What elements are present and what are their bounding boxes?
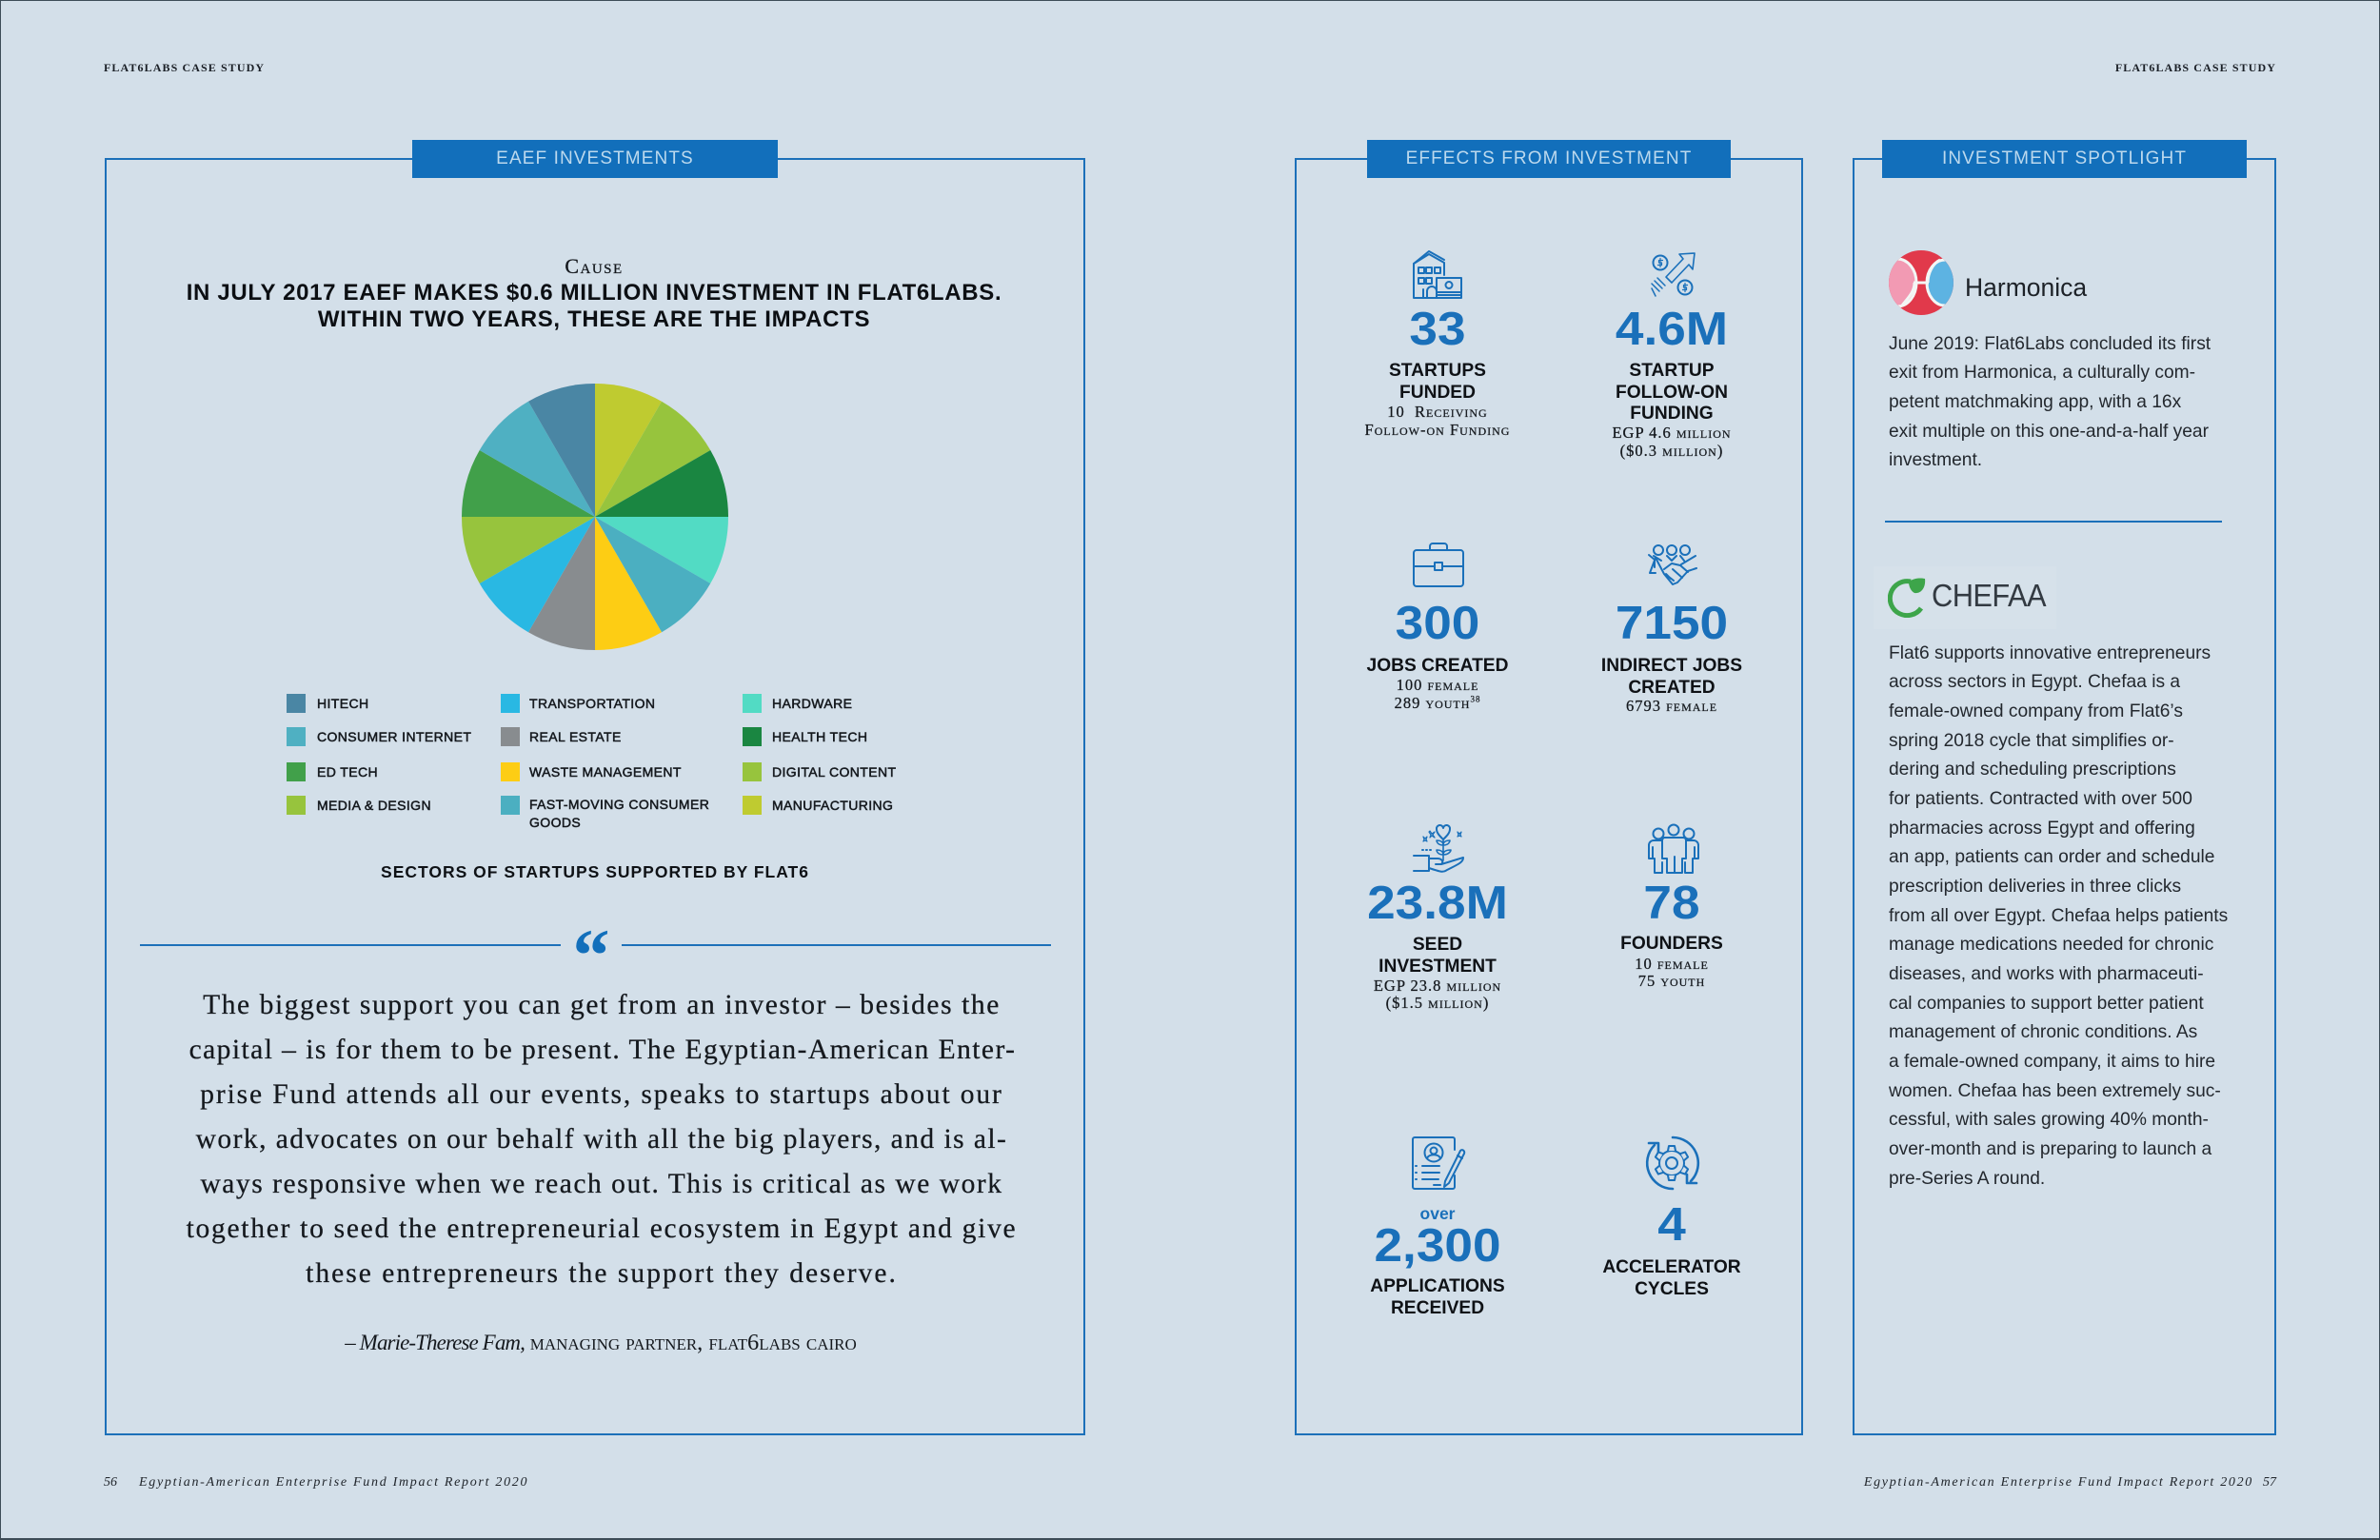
legend item: hitech: HITECH	[317, 696, 369, 711]
cause label: Cause	[565, 254, 624, 278]
footer left: Egyptian-American Enterprise Fund Impact Report 2020	[139, 1475, 528, 1490]
text: Chefaa summary: Flat6 supports innovative entrepreneurs	[1889, 643, 2211, 662]
chart caption: SECTORS OF STARTUPS SUPPORTED BY FLAT6	[381, 862, 809, 881]
number: 33	[1409, 303, 1466, 354]
label: FOUNDERS	[1620, 934, 1723, 954]
legend item: fast-moving consumer goods	[501, 796, 709, 830]
legend item: digital content	[743, 762, 896, 781]
panel heading: EAEF investments: EAEF INVESTMENTS	[496, 148, 694, 168]
label: INDIRECT JOBS	[1601, 656, 1742, 676]
pull quote: The biggest support you can get from an investor – besides the	[203, 990, 1001, 1020]
number: 23.8M	[1367, 878, 1508, 929]
text: Chefaa summary: cal companies to support better patient	[1889, 994, 2204, 1014]
text: Chefaa summary: management of chronic conditions. As	[1889, 1022, 2197, 1042]
legend item: hardware	[743, 694, 852, 713]
detail: 289 youth38	[1395, 693, 1480, 712]
number: 4	[1657, 1199, 1686, 1251]
logo mark: green ring with leaf	[1888, 578, 1926, 618]
icon: briefcase	[1413, 543, 1464, 587]
legend item: health tech: HEALTH TECH	[772, 729, 867, 744]
icon: application form with pencil	[1412, 1136, 1465, 1191]
headline: investment statement: IN JULY 2017 EAEF MAKES $0.6 MILLION INVESTMENT IN FLAT6LABS.	[187, 280, 1002, 306]
legend item: media and design: MEDIA & DESIGN	[317, 798, 431, 813]
legend item: fast-moving consumer goods: GOODS	[529, 815, 581, 830]
legend item: digital content: DIGITAL CONTENT	[772, 764, 896, 780]
label: JOBS CREATED	[1367, 656, 1508, 676]
icon: handshake with people	[1648, 544, 1697, 585]
running header left: FLAT6LABS CASE STUDY	[104, 61, 265, 74]
logo wordmark: CHEFAA	[1932, 579, 2046, 614]
label: STARTUPS	[1389, 361, 1486, 381]
text: Chefaa summary: manage medications needed for chronic	[1889, 935, 2213, 955]
pull quote	[187, 990, 1017, 1289]
text: Chefaa summary: spring 2018 cycle that simplifies or-	[1889, 731, 2174, 751]
legend item: manufacturing	[743, 796, 893, 815]
panel: investment spotlight frame	[1853, 158, 2276, 1435]
pull quote: together to seed the entrepreneurial ecosystem in Egypt and give	[187, 1213, 1017, 1243]
stat: founders	[1620, 824, 1723, 990]
number: 2,300	[1374, 1220, 1501, 1272]
text: Harmonica summary: June 2019: Flat6Labs concluded its first	[1889, 333, 2211, 354]
icon: hand holding a growing plant	[1413, 824, 1464, 873]
detail	[1365, 403, 1510, 438]
legend item: manufacturing: MANUFACTURING	[772, 798, 893, 813]
text: Chefaa summary: diseases, and works with pharmaceuti-	[1889, 964, 2204, 984]
panel: effects from investment frame	[1295, 158, 1803, 1435]
icon: three people	[1648, 824, 1699, 874]
detail: 6793 female	[1626, 697, 1717, 715]
text: Chefaa summary: cessful, with sales growing 40% month-	[1889, 1110, 2209, 1130]
running header right: FLAT6LABS CASE STUDY	[2115, 61, 2276, 74]
text: Harmonica summary: exit from Harmonica, a culturally com-	[1889, 363, 2195, 383]
label: INVESTMENT	[1378, 957, 1497, 977]
panel heading: effects from investment	[1367, 140, 1731, 178]
detail: 10 Receiving	[1387, 403, 1488, 421]
legend item: hardware: HARDWARE	[772, 696, 852, 711]
pull quote: these entrepreneurs the support they deserve.	[306, 1258, 898, 1289]
stat: seed investment	[1367, 824, 1508, 1012]
detail	[1395, 676, 1480, 712]
label	[1389, 361, 1486, 403]
legend item: waste management	[501, 762, 682, 781]
headline: investment statement: WITHIN TWO YEARS, THESE ARE THE IMPACTS	[318, 306, 870, 332]
footer left: 56	[104, 1475, 117, 1490]
legend item: media and design	[287, 796, 431, 815]
pull quote: work, advocates on our behalf with all the big players, and is al-	[196, 1123, 1007, 1154]
detail: 100 female	[1397, 676, 1478, 694]
label: FUNDING	[1630, 404, 1714, 424]
text: Chefaa summary: for patients. Contracted with over 500	[1889, 789, 2192, 809]
label: SEED	[1413, 935, 1462, 955]
legend item: ed tech: ED TECH	[317, 764, 378, 780]
icon: gear with cycle arrows	[1646, 1136, 1699, 1190]
detail: 10 female	[1635, 954, 1709, 973]
company name: Harmonica: Harmonica	[1965, 273, 2087, 302]
pull quote: ways responsive when we reach out. This is critical as we work	[200, 1169, 1003, 1199]
legend item: fast-moving consumer goods: FAST-MOVING CONSUMER	[529, 797, 709, 812]
label: ACCELERATOR	[1602, 1257, 1741, 1277]
panel heading: investment spotlight: INVESTMENT SPOTLIGHT	[1942, 148, 2187, 168]
label	[1616, 361, 1728, 424]
legend item: real estate: REAL ESTATE	[529, 729, 622, 744]
legend item: health tech	[743, 727, 867, 746]
legend: sectors	[287, 694, 896, 830]
text: Chefaa summary: an app, patients can order and schedule	[1889, 847, 2214, 867]
text: Harmonica summary: investment.	[1889, 450, 1982, 470]
stat: startups funded	[1365, 250, 1510, 438]
text: Harmonica summary: exit multiple on this one-and-a-half year	[1889, 422, 2209, 442]
number: 78	[1643, 878, 1700, 929]
legend item: consumer internet: CONSUMER INTERNET	[317, 729, 471, 744]
detail	[1612, 424, 1732, 460]
legend item: waste management: WASTE MANAGEMENT	[529, 764, 682, 780]
panel: EAEF investments frame	[105, 158, 1085, 1435]
legend item: transportation	[501, 694, 655, 713]
legend item: consumer internet	[287, 727, 471, 746]
pie chart: sectors of startups	[462, 384, 728, 650]
label: CYCLES	[1635, 1279, 1709, 1299]
number: 4.6M	[1616, 303, 1728, 354]
stat: startup follow-on funding	[1612, 252, 1732, 460]
stat: accelerator cycles	[1557, 1134, 1786, 1300]
label	[1323, 1276, 1552, 1319]
number: 300	[1396, 598, 1479, 649]
panel heading: effects from investment: EFFECTS FROM INVESTMENT	[1406, 148, 1692, 168]
label: RECEIVED	[1391, 1298, 1484, 1318]
logo: Harmonica mark	[1889, 250, 1954, 315]
number: 7150	[1616, 598, 1728, 649]
panel heading: investment spotlight	[1882, 140, 2247, 178]
label: FUNDED	[1399, 383, 1476, 403]
text: Chefaa summary: prescription deliveries in three clicks	[1889, 877, 2181, 897]
label	[1601, 656, 1742, 698]
label: FOLLOW-ON	[1616, 383, 1728, 403]
text: Chefaa summary: pre-Series A round.	[1889, 1169, 2045, 1189]
icon: quotation mark: “	[573, 914, 609, 997]
text: Chefaa summary: pharmacies across Egypt and offering	[1889, 819, 2195, 839]
text: Chefaa summary: female-owned company from Flat6’s	[1889, 701, 2183, 721]
label: APPLICATIONS	[1370, 1276, 1505, 1296]
detail	[1635, 954, 1709, 990]
label	[1557, 1257, 1786, 1300]
text: Harmonica summary: petent matchmaking app, with a 16x	[1889, 392, 2181, 412]
label	[1378, 935, 1497, 977]
text: Chefaa summary: women. Chefaa has been extremely suc-	[1889, 1081, 2221, 1101]
text: Harmonica summary	[1889, 329, 2211, 476]
stat: applications received	[1323, 1134, 1552, 1319]
detail: ($0.3 million)	[1620, 442, 1723, 460]
stat: indirect jobs created	[1601, 544, 1742, 715]
footer right: 57	[2263, 1475, 2276, 1490]
text: Chefaa summary: dering and scheduling prescriptions	[1889, 760, 2176, 780]
detail: EGP 23.8 million	[1374, 977, 1501, 994]
panel heading: EAEF investments	[412, 140, 778, 178]
text: Chefaa summary: from all over Egypt. Chefaa helps patients	[1889, 906, 2228, 926]
headline: investment statement	[187, 280, 1002, 332]
text: Chefaa summary: a female-owned company, it aims to hire	[1889, 1052, 2215, 1072]
detail	[1374, 977, 1501, 1012]
quote attribution: – Marie-Therese Fam, managing partner, flat6labs cairo	[345, 1330, 857, 1355]
detail: Follow-on Funding	[1365, 421, 1510, 438]
icon: building and money	[1413, 250, 1462, 299]
detail: 75 youth	[1638, 972, 1705, 990]
label: STARTUP	[1629, 361, 1715, 381]
detail: EGP 4.6 million	[1612, 424, 1732, 442]
label: CREATED	[1628, 678, 1716, 698]
stat: jobs created	[1367, 543, 1508, 712]
icon: upward arrow with dollar coins	[1651, 252, 1696, 297]
logo: Chefaa	[1874, 566, 2056, 629]
text: Chefaa summary: across sectors in Egypt. Chefaa is a	[1889, 672, 2180, 692]
pull quote: capital – is for them to be present. The Egyptian-American Enter-	[189, 1034, 1016, 1064]
legend item: ed tech	[287, 762, 378, 781]
legend item: transportation: TRANSPORTATION	[529, 696, 655, 711]
detail: ($1.5 million)	[1386, 994, 1489, 1012]
legend item: hitech	[287, 694, 369, 713]
pull quote: prise Fund attends all our events, speaks to startups about our	[200, 1079, 1003, 1110]
over label: over	[1420, 1204, 1455, 1223]
text: Chefaa summary: over-month and is preparing to launch a	[1889, 1139, 2211, 1159]
legend item: real estate	[501, 727, 622, 746]
footer right: Egyptian-American Enterprise Fund Impact Report 2020	[1864, 1475, 2253, 1490]
text: Chefaa summary	[1889, 640, 2228, 1194]
